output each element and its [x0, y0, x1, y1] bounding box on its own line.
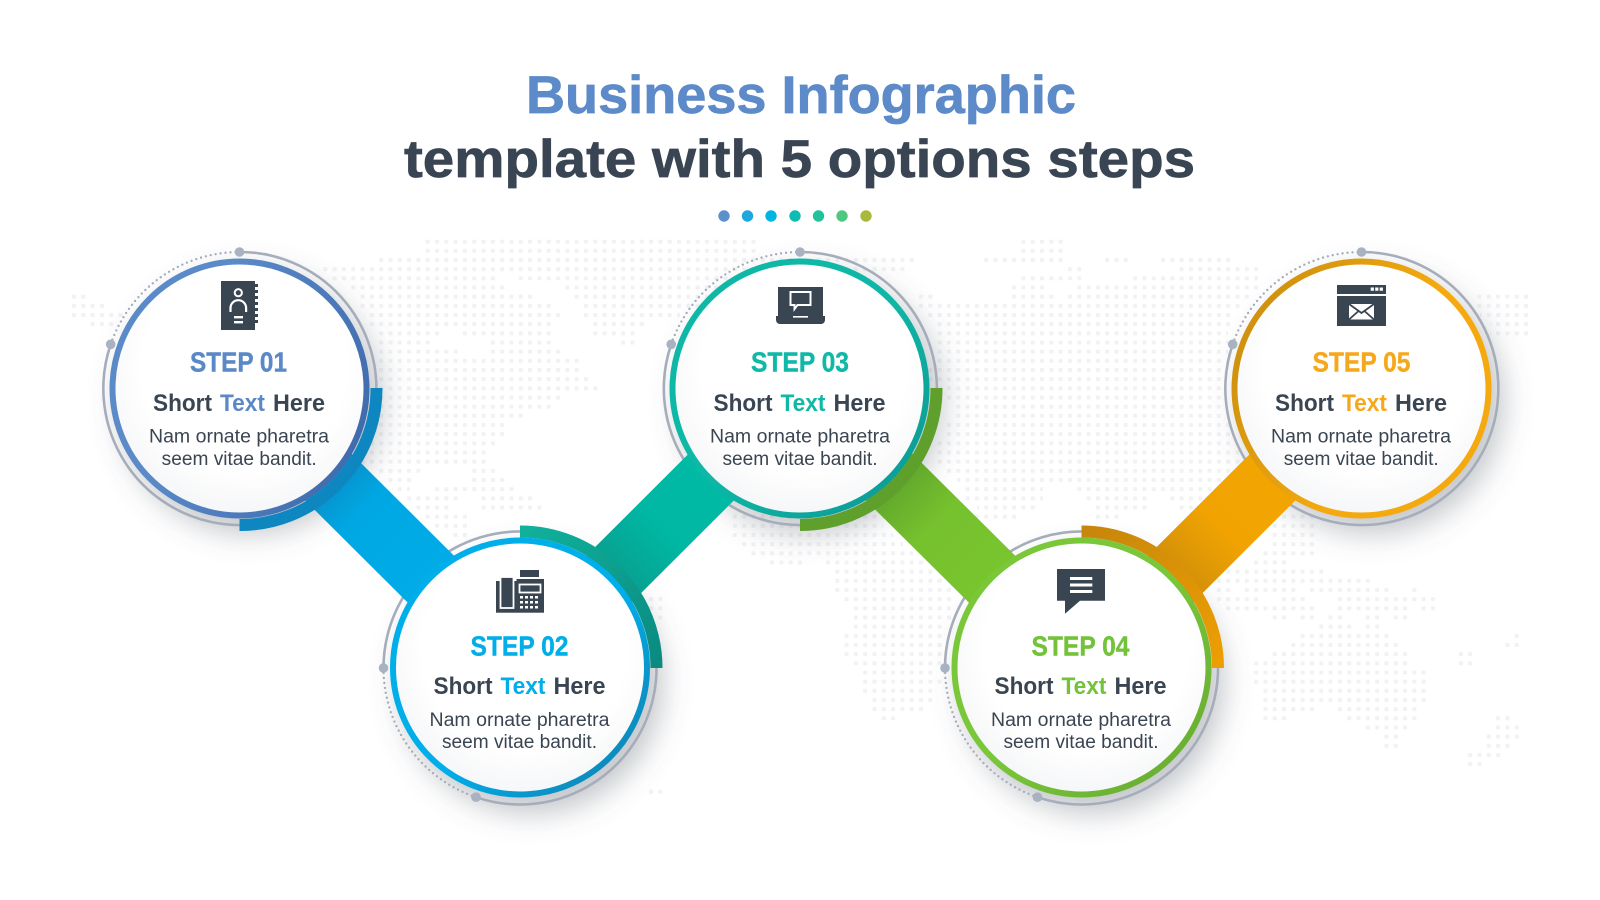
subtitle: Text: [500, 673, 546, 700]
step label: STEP 04: [1032, 631, 1130, 662]
body text: [710, 427, 890, 470]
body text: Nam ornate pharetra: [149, 427, 329, 448]
connector: step 04 to step 05: [1058, 366, 1384, 691]
body text: [430, 710, 610, 753]
body text: seem vitae bandit.: [1284, 449, 1439, 470]
connector: step 02 to step 03: [497, 366, 823, 691]
body text: Nam ornate pharetra: [430, 710, 610, 731]
body text: seem vitae bandit.: [442, 732, 597, 753]
arc band: step 01: [240, 388, 377, 525]
step label: STEP 05: [1312, 347, 1410, 378]
orbit ring: step 02: [379, 531, 656, 804]
icon: message bubble: [1057, 569, 1105, 614]
panel: step 04: [954, 540, 1208, 794]
arc band: step 03: [800, 388, 937, 525]
arc band: step 04: [1082, 532, 1218, 668]
panel: step 01: [112, 262, 366, 516]
subtitle: Here: [1395, 390, 1447, 417]
panel: step 05: [1234, 262, 1488, 516]
panel: step 02: [393, 540, 647, 794]
body text: seem vitae bandit.: [162, 449, 317, 470]
body text: Nam ornate pharetra: [1271, 427, 1451, 448]
connector: step 03 to step 04: [777, 365, 1105, 691]
step label: STEP 03: [751, 347, 849, 378]
arc band: step 02: [520, 532, 656, 668]
subtitle: Short: [994, 673, 1054, 700]
orbit ring: step 05: [1225, 247, 1498, 525]
body text: Nam ornate pharetra: [710, 427, 890, 448]
subtitle: Text: [780, 390, 826, 417]
disc with ring: [1234, 262, 1488, 516]
orbit ring: step 01: [103, 247, 376, 525]
connector: step 01 to step 02: [216, 365, 543, 691]
subtitle: Short: [153, 390, 212, 417]
subtitle: Text: [1062, 673, 1106, 700]
subtitle: Text: [1342, 390, 1387, 417]
body text: Nam ornate pharetra: [991, 710, 1171, 731]
body text: [991, 710, 1171, 753]
decorative coloured dots row: [718, 210, 872, 222]
step label: STEP 01: [190, 347, 287, 378]
subtitle: Here: [1114, 673, 1166, 700]
subtitle: Short: [434, 673, 492, 700]
title line 1: Business Infographic: [526, 66, 1076, 125]
disc with ring: [393, 540, 647, 794]
subtitle: Here: [834, 390, 886, 417]
icon: fax machine: [496, 570, 544, 613]
disc with ring: [112, 262, 366, 516]
subtitle: Short: [1275, 390, 1334, 417]
subtitle: [714, 390, 886, 417]
soft drop shadows: [118, 270, 1504, 814]
icon: laptop with speech bubble: [776, 287, 825, 324]
panel: step 03: [672, 262, 926, 516]
icon: address book: [221, 281, 258, 330]
body text: seem vitae bandit.: [1004, 732, 1158, 753]
subtitle: [994, 673, 1166, 700]
subtitle: Text: [220, 390, 265, 417]
subtitle: [1275, 390, 1447, 417]
subtitle: [434, 673, 606, 700]
subtitle: Here: [273, 390, 325, 417]
background: dotted world map: [71, 242, 1530, 792]
title: [404, 66, 1195, 189]
orbit ring: step 03: [664, 247, 937, 525]
icon: email window: [1337, 285, 1386, 326]
body text: seem vitae bandit.: [722, 449, 878, 470]
subtitle: Short: [714, 390, 772, 417]
disc with ring: [954, 540, 1208, 794]
title line 2: template with 5 options steps: [404, 130, 1195, 189]
body text: [1271, 427, 1451, 470]
subtitle: Here: [554, 673, 606, 700]
body text: [149, 427, 329, 470]
orbit ring: step 04: [940, 531, 1218, 804]
step label: STEP 02: [470, 631, 568, 662]
subtitle: [153, 390, 325, 417]
disc with ring: [672, 262, 926, 516]
